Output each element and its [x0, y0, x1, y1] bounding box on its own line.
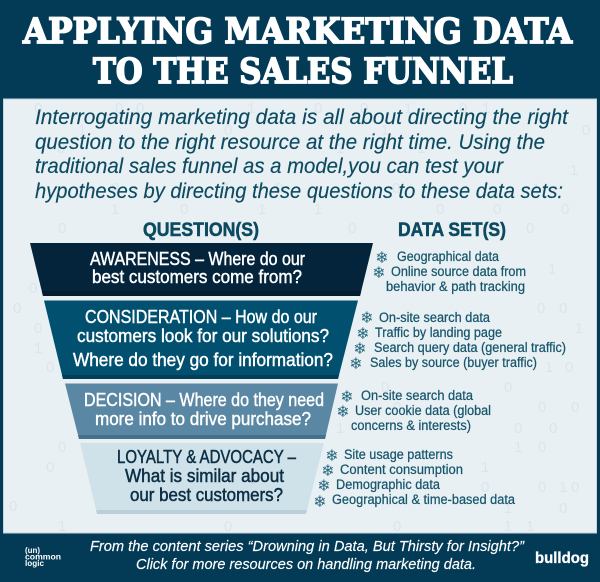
- funnel tier: consideration: CONSIDERATION – How do our: [85, 307, 317, 327]
- panel: main light background: 1: [545, 359, 553, 376]
- funnel tier: consideration: [44, 300, 358, 379]
- footer text: Click for more resources on handling marketing data.: [136, 556, 476, 573]
- panel: main light background: 0: [538, 439, 546, 456]
- logo: bulldog: bulldog: [535, 550, 589, 567]
- panel: main light background: 1: [78, 122, 86, 139]
- panel: main light background: 1: [481, 459, 489, 476]
- intro text block: question to the right resource at the right time. Using the: [35, 130, 545, 154]
- panel: main light background: 0: [582, 122, 590, 139]
- logo: uncommon logic: [25, 545, 61, 568]
- data sets: awareness: ❄: [372, 263, 386, 282]
- panel: main light background: 0: [559, 500, 567, 517]
- panel: main light background: 0: [29, 280, 37, 297]
- panel: main light background: 1: [526, 518, 534, 535]
- panel: main light background: 0: [34, 320, 42, 337]
- panel: main light background: 1: [34, 340, 42, 357]
- funnel tier: decision: more info to drive purchase?: [95, 409, 311, 429]
- panel: main light background: 0: [58, 439, 66, 456]
- panel: main light background: 1: [548, 261, 556, 278]
- footer text: From the content series “Drowning in Data, But Thirsty for Insight?”: [90, 538, 525, 555]
- panel: main light background: 1: [570, 162, 578, 179]
- funnel tier: awareness: AWARENESS – Where do our: [90, 249, 305, 269]
- panel: main light background: 0: [559, 300, 567, 317]
- data sets: loyalty and advocacy: Demographic data: [336, 477, 440, 492]
- panel: main light background: 0: [111, 180, 119, 197]
- data sets: consideration: Sales by source (buyer traffic): [370, 355, 537, 370]
- data sets: consideration: [349, 308, 566, 373]
- funnel tier: loyalty and advocacy: LOYALTY & ADVOCACY –: [117, 447, 296, 467]
- data sets: loyalty and advocacy: ❄: [317, 476, 331, 495]
- panel: main light background: 1: [417, 140, 425, 157]
- data sets: consideration: ❄: [356, 324, 370, 343]
- data sets: awareness: Geographical data: [397, 249, 499, 264]
- panel: main light background: 0: [13, 300, 21, 317]
- logo: uncommon logic: logic: [25, 558, 44, 568]
- panel: main light background: 0: [493, 201, 501, 218]
- panel: main light background: 1: [222, 180, 230, 197]
- data sets: loyalty and advocacy: ❄: [325, 446, 339, 465]
- funnel tier: decision: DECISION – Where do they need: [84, 390, 324, 410]
- intro text block: hypotheses by directing these questions to these data sets:: [35, 179, 563, 203]
- panel: main light background: 0: [514, 420, 522, 437]
- data sets: decision: ❄: [340, 387, 354, 406]
- panel: main light background: 0: [504, 379, 512, 396]
- panel: main light background: 0: [393, 518, 401, 535]
- data sets: consideration: ❄: [353, 339, 367, 358]
- data sets: consideration: On-site search data: [379, 310, 490, 325]
- panel: main light background: 1: [247, 100, 255, 117]
- data sets: loyalty and advocacy: [313, 446, 515, 511]
- panel: main light background: 0: [314, 100, 322, 117]
- panel: main light background: 0: [565, 359, 573, 376]
- heading: questions: QUESTION(S): [143, 220, 259, 241]
- data sets: awareness: behavior & path tracking: [386, 279, 525, 294]
- data sets: awareness: [372, 248, 526, 294]
- panel: main light background: 1: [58, 518, 66, 535]
- panel: main light background: 0: [436, 201, 444, 218]
- data sets: awareness: ❄: [375, 248, 389, 267]
- panel: main light background: 0: [58, 220, 66, 237]
- panel: main light background: 0: [115, 100, 123, 117]
- panel: main light background: 1: [111, 201, 119, 218]
- panel: main light background: 1: [514, 439, 522, 456]
- data sets: decision: On-site search data: [361, 388, 473, 403]
- panel: main light background: 0: [136, 100, 144, 117]
- data sets: loyalty and advocacy: ❄: [321, 461, 335, 480]
- data sets: consideration: ❄: [360, 308, 374, 327]
- panel: main light background: 1: [559, 479, 567, 496]
- logo: uncommon logic: (un): [25, 545, 40, 555]
- panel: main light background: 0: [348, 220, 356, 237]
- data sets: consideration: ❄: [349, 354, 363, 373]
- funnel tier: loyalty and advocacy: What is similar about: [125, 466, 284, 486]
- panel: main light background: 0: [180, 201, 188, 218]
- footer text: [90, 538, 525, 573]
- panel: main light background: 1: [504, 518, 512, 535]
- data sets: decision: concerns & interests): [351, 418, 471, 433]
- panel: main light background: 0: [538, 399, 546, 416]
- panel: main light background: 0: [381, 379, 389, 396]
- panel: main light background: 0: [459, 100, 467, 117]
- panel: main light background: 1: [189, 140, 197, 157]
- title: APPLYING MARKETING DATA: [22, 11, 573, 52]
- panel: main light background: 0: [481, 479, 489, 496]
- data sets: awareness: Online source data from: [391, 264, 526, 279]
- panel: main light background: 1: [314, 201, 322, 218]
- intro text block: traditional sales funnel as a model,you can test your: [35, 154, 504, 178]
- title: TO THE SALES FUNNEL: [93, 51, 513, 92]
- funnel tier: consideration: Where do they go for information?: [73, 350, 333, 370]
- funnel tier: decision: [65, 384, 338, 439]
- funnel tier: loyalty and advocacy: our best customers?: [130, 485, 283, 505]
- panel: main light background: 0: [538, 479, 546, 496]
- panel: main light background: 1: [575, 320, 583, 337]
- panel: main light background: 1: [336, 420, 344, 437]
- panel: main light background: 0: [224, 518, 232, 535]
- panel: main light background: 1: [258, 201, 266, 218]
- funnel tier: awareness: [30, 243, 373, 296]
- panel: main light background: 1: [404, 100, 412, 117]
- panel: main light background: 0: [549, 420, 557, 437]
- data sets: decision: User cookie data (global: [355, 403, 491, 418]
- panel: main light background: 0: [537, 300, 545, 317]
- panel: main light background: [4, 99, 596, 535]
- panel: main light background: 1: [482, 100, 490, 117]
- panel: main light background: 0: [224, 122, 232, 139]
- panel: main light background: 0: [34, 100, 42, 117]
- panel: main light background: 0: [360, 100, 368, 117]
- heading: data sets: DATA SET(S): [398, 220, 506, 241]
- panel: main light background: 0: [392, 180, 400, 197]
- panel: main light background: 0: [9, 498, 17, 515]
- intro text block: Interrogating marketing data is all about directing the right: [35, 105, 569, 129]
- panel: main light background: 0: [57, 140, 65, 157]
- data sets: loyalty and advocacy: Geographical & time-based data: [332, 492, 515, 507]
- intro text block: [35, 105, 569, 203]
- logo: uncommon logic: common: [25, 552, 61, 562]
- data sets: consideration: Traffic by landing page: [375, 325, 502, 340]
- data sets: decision: ❄: [336, 402, 350, 421]
- data sets: consideration: Search query data (general traffic): [374, 340, 566, 355]
- funnel tier: consideration: customers look for our solutions?: [77, 326, 329, 346]
- panel: main light background: 1: [381, 122, 389, 139]
- panel: main light background: 0: [46, 459, 54, 476]
- panel: main light background: 1: [336, 140, 344, 157]
- panel: main light background: 0: [571, 479, 579, 496]
- panel: main light background: 0: [571, 399, 579, 416]
- panel: main light background: 1: [532, 180, 540, 197]
- panel: main light background: 1: [504, 500, 512, 517]
- panel: main light background: 0: [561, 201, 569, 218]
- funnel tier: awareness: best customers come from?: [92, 267, 302, 287]
- data sets: decision: [336, 387, 491, 433]
- panel: main light background: 0: [46, 359, 54, 376]
- data sets: loyalty and advocacy: ❄: [313, 492, 327, 511]
- data sets: loyalty and advocacy: Content consumption: [340, 462, 463, 477]
- funnel tier: loyalty and advocacy: [80, 443, 324, 514]
- panel: main light background: 0: [393, 399, 401, 416]
- panel: main light background: 0: [526, 220, 534, 237]
- title: [22, 11, 573, 92]
- panel: main light background: 0: [275, 180, 283, 197]
- data sets: loyalty and advocacy: Site usage patterns: [344, 447, 453, 462]
